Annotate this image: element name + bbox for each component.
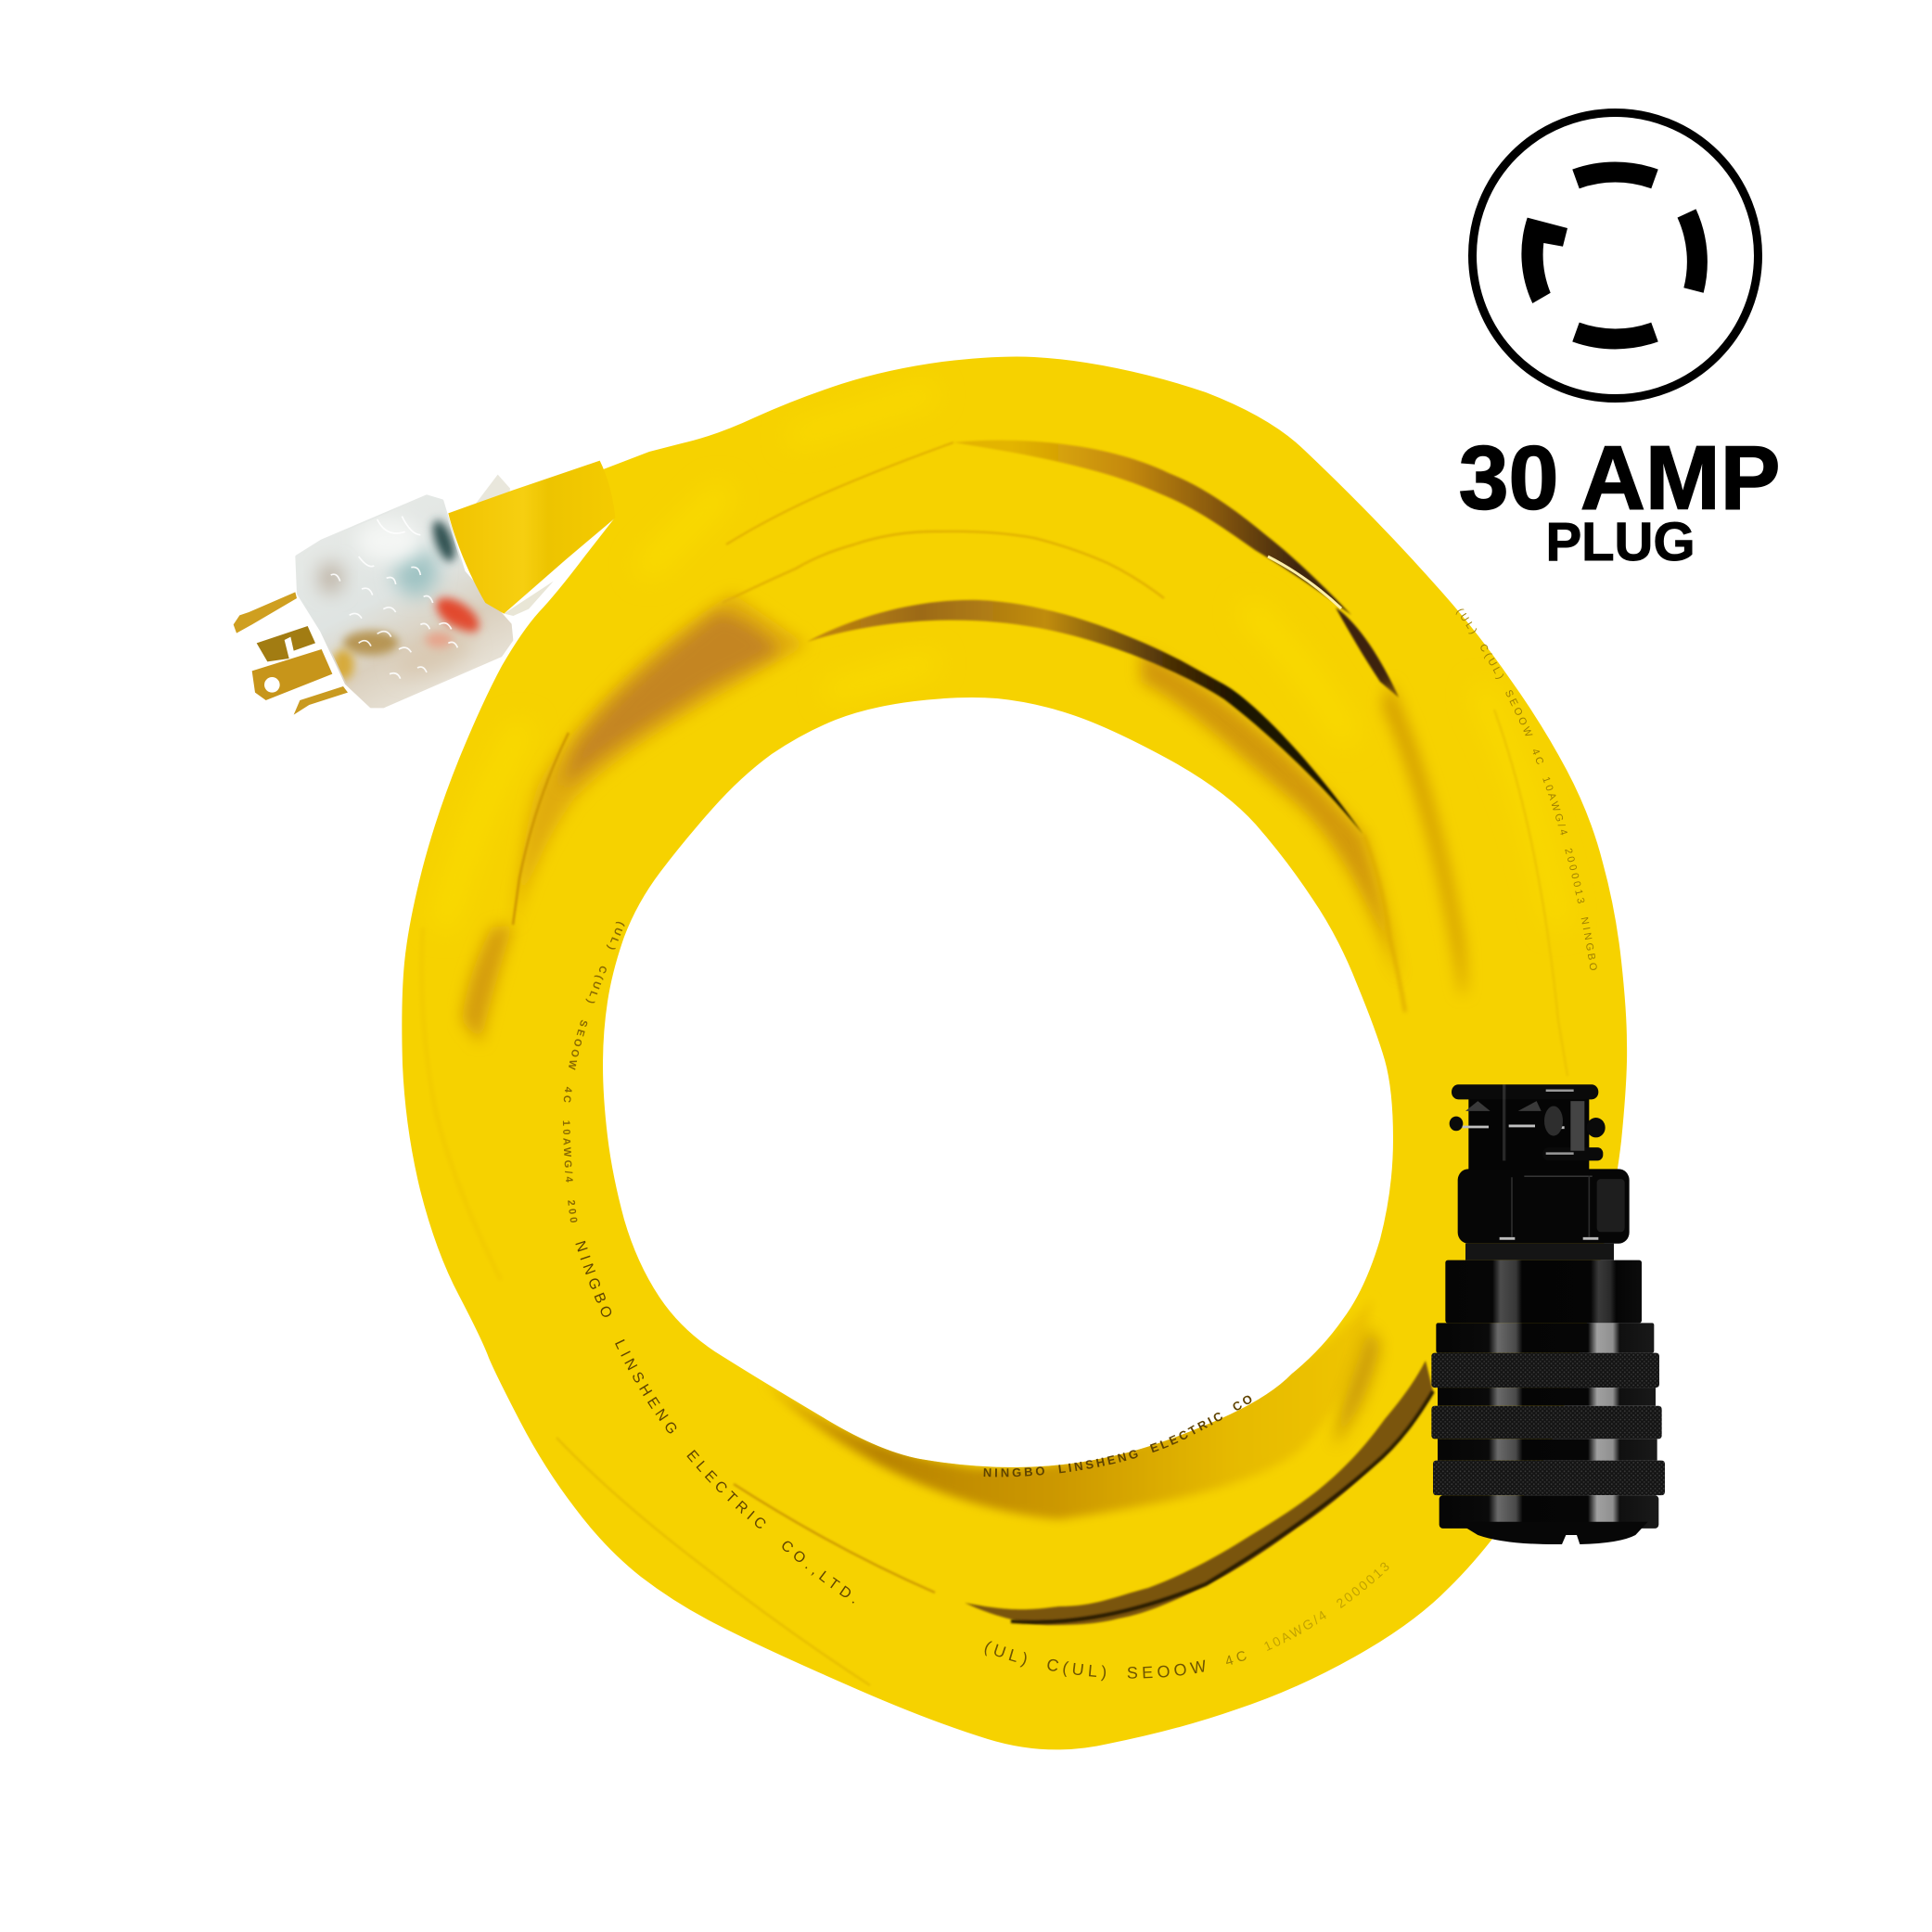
infographic canvas xyxy=(234,109,1778,1749)
plug transparent body xyxy=(297,496,512,707)
clear lighted plug xyxy=(234,461,615,715)
clear collar tab xyxy=(464,475,510,526)
yellow coiled cord xyxy=(402,356,1627,1749)
plug label: PLUG xyxy=(1545,512,1695,572)
cord silhouette xyxy=(402,357,1627,1749)
black connector xyxy=(1431,1084,1665,1544)
clear wedge under strain relief xyxy=(504,582,554,616)
bottom slot xyxy=(1576,332,1655,339)
cord lettering: left: NINGBO LINSHENG ELECTRIC CO.,LTD. xyxy=(575,1241,854,1604)
knurled ring 1 xyxy=(1431,1353,1659,1388)
amperage label: 30 AMP xyxy=(1459,427,1780,529)
icon ring xyxy=(1473,113,1759,399)
top slot xyxy=(1576,173,1655,179)
left hooked slot xyxy=(1521,218,1567,303)
knurled ring 2 xyxy=(1431,1406,1662,1439)
strain relief xyxy=(448,461,615,614)
plug prongs xyxy=(234,592,348,715)
shoulder ring xyxy=(1436,1323,1654,1353)
hex nut xyxy=(1458,1169,1630,1244)
right slot xyxy=(1686,213,1697,290)
cord lettering: bottom: (UL) C(UL) SEOOW 4C 10AWG/4 2000013 xyxy=(985,1562,1389,1681)
connector tip xyxy=(1456,1522,1648,1544)
cord shading xyxy=(422,394,1567,1685)
clamp xyxy=(1450,1084,1606,1171)
knurled ring 3 xyxy=(1433,1461,1665,1495)
plain ring 3 xyxy=(1439,1495,1658,1529)
cord lettering: inner: NINGBO LINSHENG ELECTRIC CO xyxy=(983,1395,1252,1477)
plain ring 1 xyxy=(1438,1388,1656,1406)
cord lettering: left upper faint: (UL) C(UL) SEOOW 4C 10AWG/4 2000013 xyxy=(562,922,625,1222)
neck xyxy=(1465,1244,1614,1260)
cord lettering: upper right: (UL) C(UL) SEOOW 4C 10AWG/4 2000013 NINGBO xyxy=(1456,608,1597,970)
socket icon xyxy=(1473,113,1759,399)
plain ring 2 xyxy=(1438,1439,1657,1461)
connector body xyxy=(1445,1260,1642,1323)
